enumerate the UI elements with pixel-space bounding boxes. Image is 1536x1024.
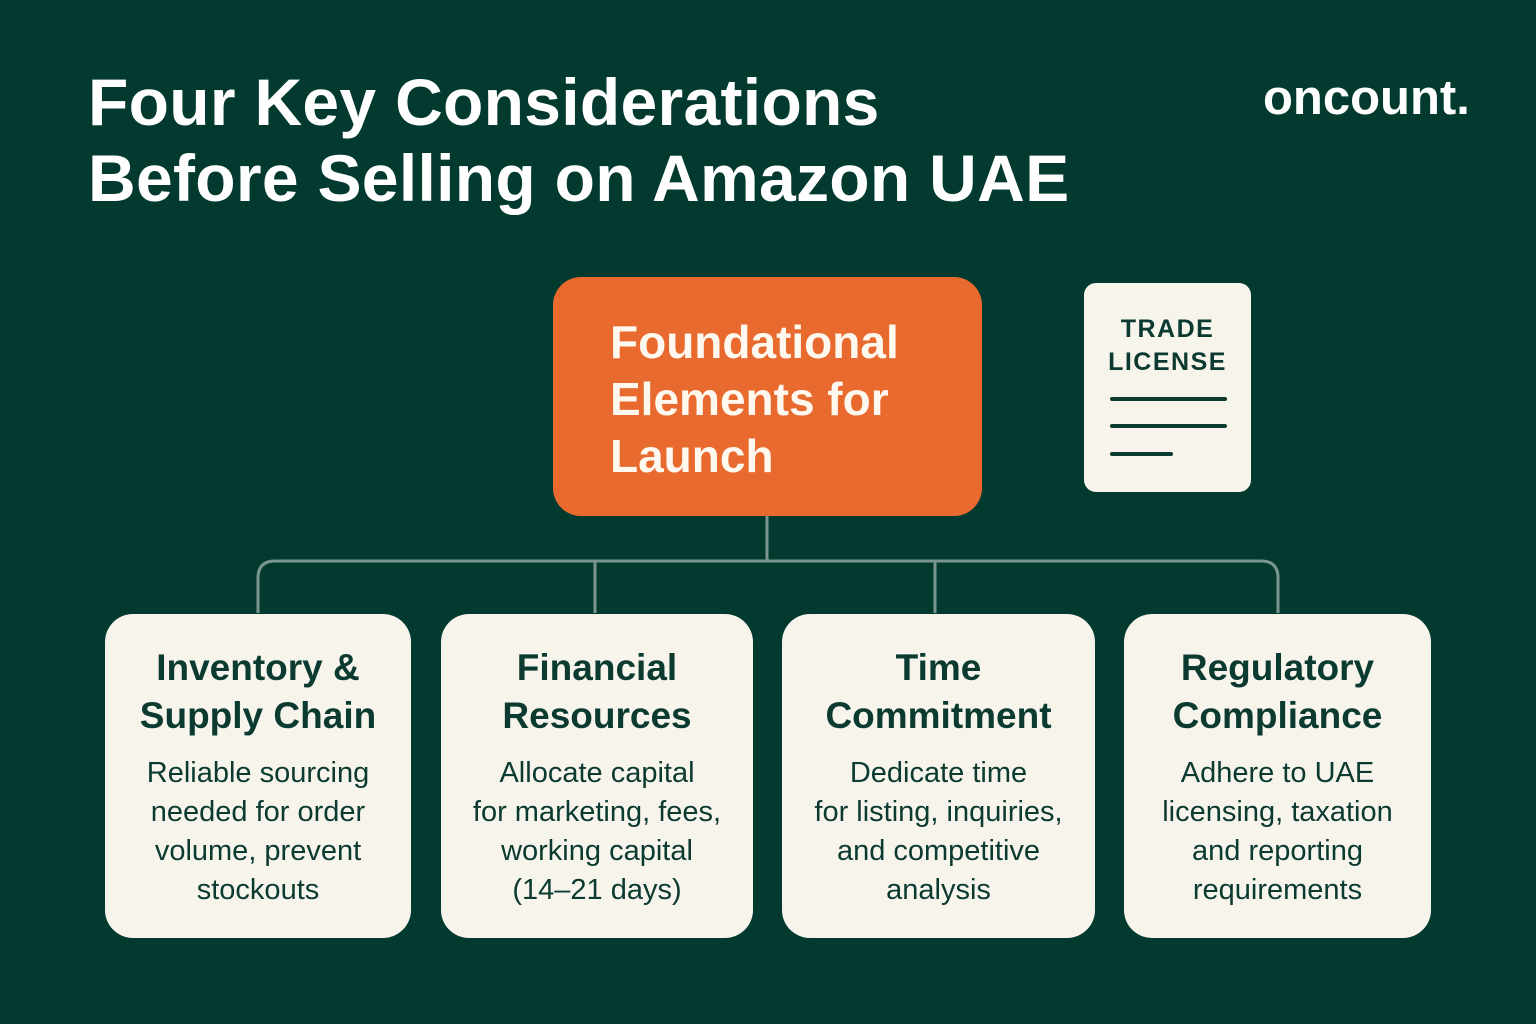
card: financial: Resources [502,695,692,736]
icon: trade license document: LICENSE [1108,348,1227,376]
card: time: Time [896,647,981,688]
icon: trade license document: TRADE [1121,315,1214,343]
card: financial: for marketing, fees, [473,796,721,828]
card: financial: Financial [517,647,677,688]
card: inventory: stockouts [197,874,319,906]
icon: trade license document [1084,283,1251,492]
title: Before Selling on Amazon UAE [88,141,1069,215]
card: inventory: Inventory & [156,647,360,688]
card: regulatory: and reporting [1192,835,1363,867]
card: time [782,614,1095,938]
card: regulatory: Compliance [1173,695,1382,736]
card: inventory: needed for order [151,796,365,828]
card: regulatory [1124,614,1431,938]
card: inventory: volume, prevent [155,835,361,867]
card: time: analysis [886,874,991,906]
hub box: foundational elements [553,277,982,516]
title: Four Key Considerations [88,65,880,139]
card: time: and competitive [837,835,1040,867]
hub box: foundational elements: Elements for [610,373,889,425]
card: time: for listing, inquiries, [814,796,1063,828]
card: financial [441,614,753,938]
card: inventory: Reliable sourcing [147,757,369,789]
hub box: foundational elements: Launch [610,430,774,482]
hub box: foundational elements: Foundational [610,316,899,368]
card: regulatory: requirements [1193,874,1362,906]
card: regulatory: licensing, taxation [1162,796,1393,828]
card: financial: (14–21 days) [512,874,682,906]
card: regulatory: Adhere to UAE [1181,757,1374,789]
card: financial: working capital [501,835,693,867]
logo: oncount. [1263,71,1470,125]
card: financial: Allocate capital [499,757,695,789]
title [88,65,1069,215]
card: time: Commitment [825,695,1052,736]
card: inventory [105,614,411,938]
card: time: Dedicate time [850,757,1027,789]
card: inventory: Supply Chain [140,695,376,736]
card: regulatory: Regulatory [1181,647,1374,688]
